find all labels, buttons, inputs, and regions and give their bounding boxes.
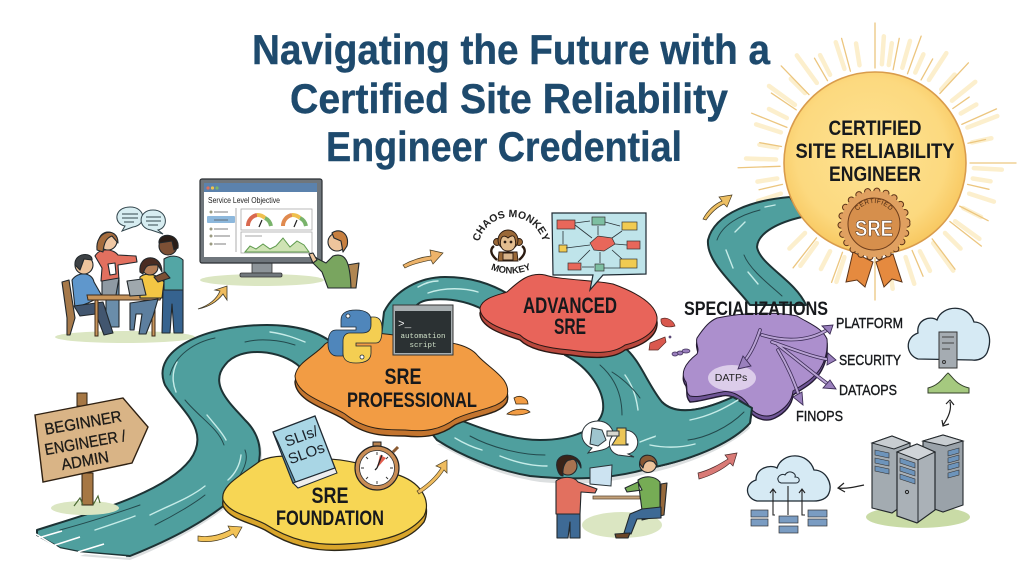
title: Certified Site Reliability	[290, 75, 729, 122]
icon: stopwatch	[355, 442, 399, 490]
stage label	[523, 293, 617, 339]
table	[593, 496, 640, 499]
signpost: beginner engineer admin	[35, 393, 148, 515]
arrow: toward the credential	[703, 195, 732, 220]
cloud with server	[908, 308, 990, 368]
terminal automation script: automation	[400, 333, 446, 341]
icon: python logo	[328, 310, 382, 363]
chaos monkey	[473, 210, 550, 274]
specialization labels	[796, 315, 903, 425]
title: Navigating the Future with a	[252, 26, 771, 73]
presenter	[309, 231, 359, 288]
book label: SLOs	[286, 439, 327, 468]
sign text: BEGINNER	[43, 408, 123, 439]
table	[87, 295, 162, 336]
certified SRE badge: CERTIFIED	[855, 198, 892, 210]
stage label: SRE	[312, 483, 348, 508]
rack: back right	[923, 435, 963, 512]
gauges panel	[241, 209, 312, 230]
sun rays	[738, 23, 1016, 300]
stage label: SRE	[554, 314, 586, 339]
chaos monkey: CHAOS MONKEY	[473, 210, 550, 240]
cloud with data racks	[747, 456, 830, 533]
stage label	[347, 364, 477, 412]
river: professional around to specializations	[425, 348, 752, 484]
stage label	[276, 483, 384, 530]
stage label: SRE	[384, 364, 422, 389]
arrow: team to dashboard	[198, 286, 227, 309]
DATPs pocket: DATPs	[715, 372, 747, 384]
medallion text: ENGINEER	[829, 163, 921, 186]
medallion text	[796, 117, 954, 186]
title	[252, 26, 771, 170]
arrow: foundation to professional	[417, 460, 447, 494]
path stage: SRE professional	[295, 333, 530, 437]
stage label: FOUNDATION	[276, 507, 384, 530]
path stage: advanced SRE	[480, 274, 675, 357]
stage label: ADVANCED	[523, 293, 617, 318]
splatter	[649, 318, 675, 350]
team collaborating	[55, 207, 195, 343]
branching arrows	[742, 328, 832, 398]
terminal automation script: script	[409, 342, 437, 350]
terminal automation script	[393, 305, 453, 355]
splatter	[507, 396, 530, 415]
seated man	[62, 255, 119, 335]
seated woman	[127, 258, 164, 334]
chaos monkey: MONKEY	[491, 263, 529, 274]
terminal automation script: >_	[398, 319, 412, 331]
book label	[282, 423, 327, 468]
speech bubbles	[117, 207, 165, 234]
sign text: ADMIN	[60, 449, 110, 474]
small rack units	[751, 510, 827, 533]
stage label: PROFESSIONAL	[347, 389, 477, 412]
stage heading: SPECIALIZATIONS	[684, 299, 828, 320]
icon: SLIs SLOs book	[273, 416, 337, 488]
arrow: servers to cloud	[838, 483, 864, 492]
dashboard heading: Service Level Objective	[208, 196, 280, 205]
sidebar menu	[207, 208, 236, 252]
window title bar	[204, 183, 317, 192]
river: final bend to the sun	[708, 197, 806, 305]
path stage: SRE foundation	[223, 456, 426, 550]
architecture diagram callout	[552, 213, 646, 290]
server racks	[866, 435, 970, 528]
certified SRE badge	[838, 188, 910, 288]
tablet	[590, 465, 612, 486]
specialization labels: FINOPS	[796, 408, 843, 425]
specialization labels: DATAOPS	[839, 382, 897, 399]
river: lower left to professional	[36, 325, 335, 560]
specialization labels: PLATFORM	[836, 315, 903, 332]
standing man	[154, 235, 183, 333]
arrow: start to foundation	[198, 526, 242, 542]
rack: left	[872, 436, 910, 513]
river end overlap on specializations	[650, 397, 752, 468]
sun medallion	[784, 72, 966, 254]
double arrow	[942, 400, 954, 426]
specialization labels: SECURITY	[839, 352, 901, 369]
medallion text: CERTIFIED	[828, 117, 922, 140]
splatter	[669, 336, 690, 356]
icon: monkey	[491, 230, 525, 261]
sign text	[43, 408, 128, 474]
book label: SLIs/	[282, 423, 321, 451]
river: professional to advanced	[380, 277, 510, 345]
woman	[556, 455, 597, 538]
arrow: professional to advanced	[403, 250, 443, 268]
arrow: toward cloud	[698, 453, 737, 479]
rack: center	[897, 444, 935, 523]
certified SRE badge: SRE	[855, 216, 893, 241]
medallion text: SITE RELIABILITY	[796, 140, 954, 163]
monitor dashboard	[200, 179, 359, 288]
title: Engineer Credential	[326, 123, 682, 170]
line chart panel	[241, 232, 312, 253]
man	[615, 455, 667, 538]
sign text: ENGINEER /	[43, 428, 128, 459]
path stage: specializations	[669, 299, 836, 420]
green mound	[928, 373, 969, 393]
speech bubbles	[582, 421, 638, 457]
DATPs pocket	[708, 365, 756, 391]
pair discussing at table	[556, 421, 667, 538]
standing woman	[95, 232, 137, 327]
